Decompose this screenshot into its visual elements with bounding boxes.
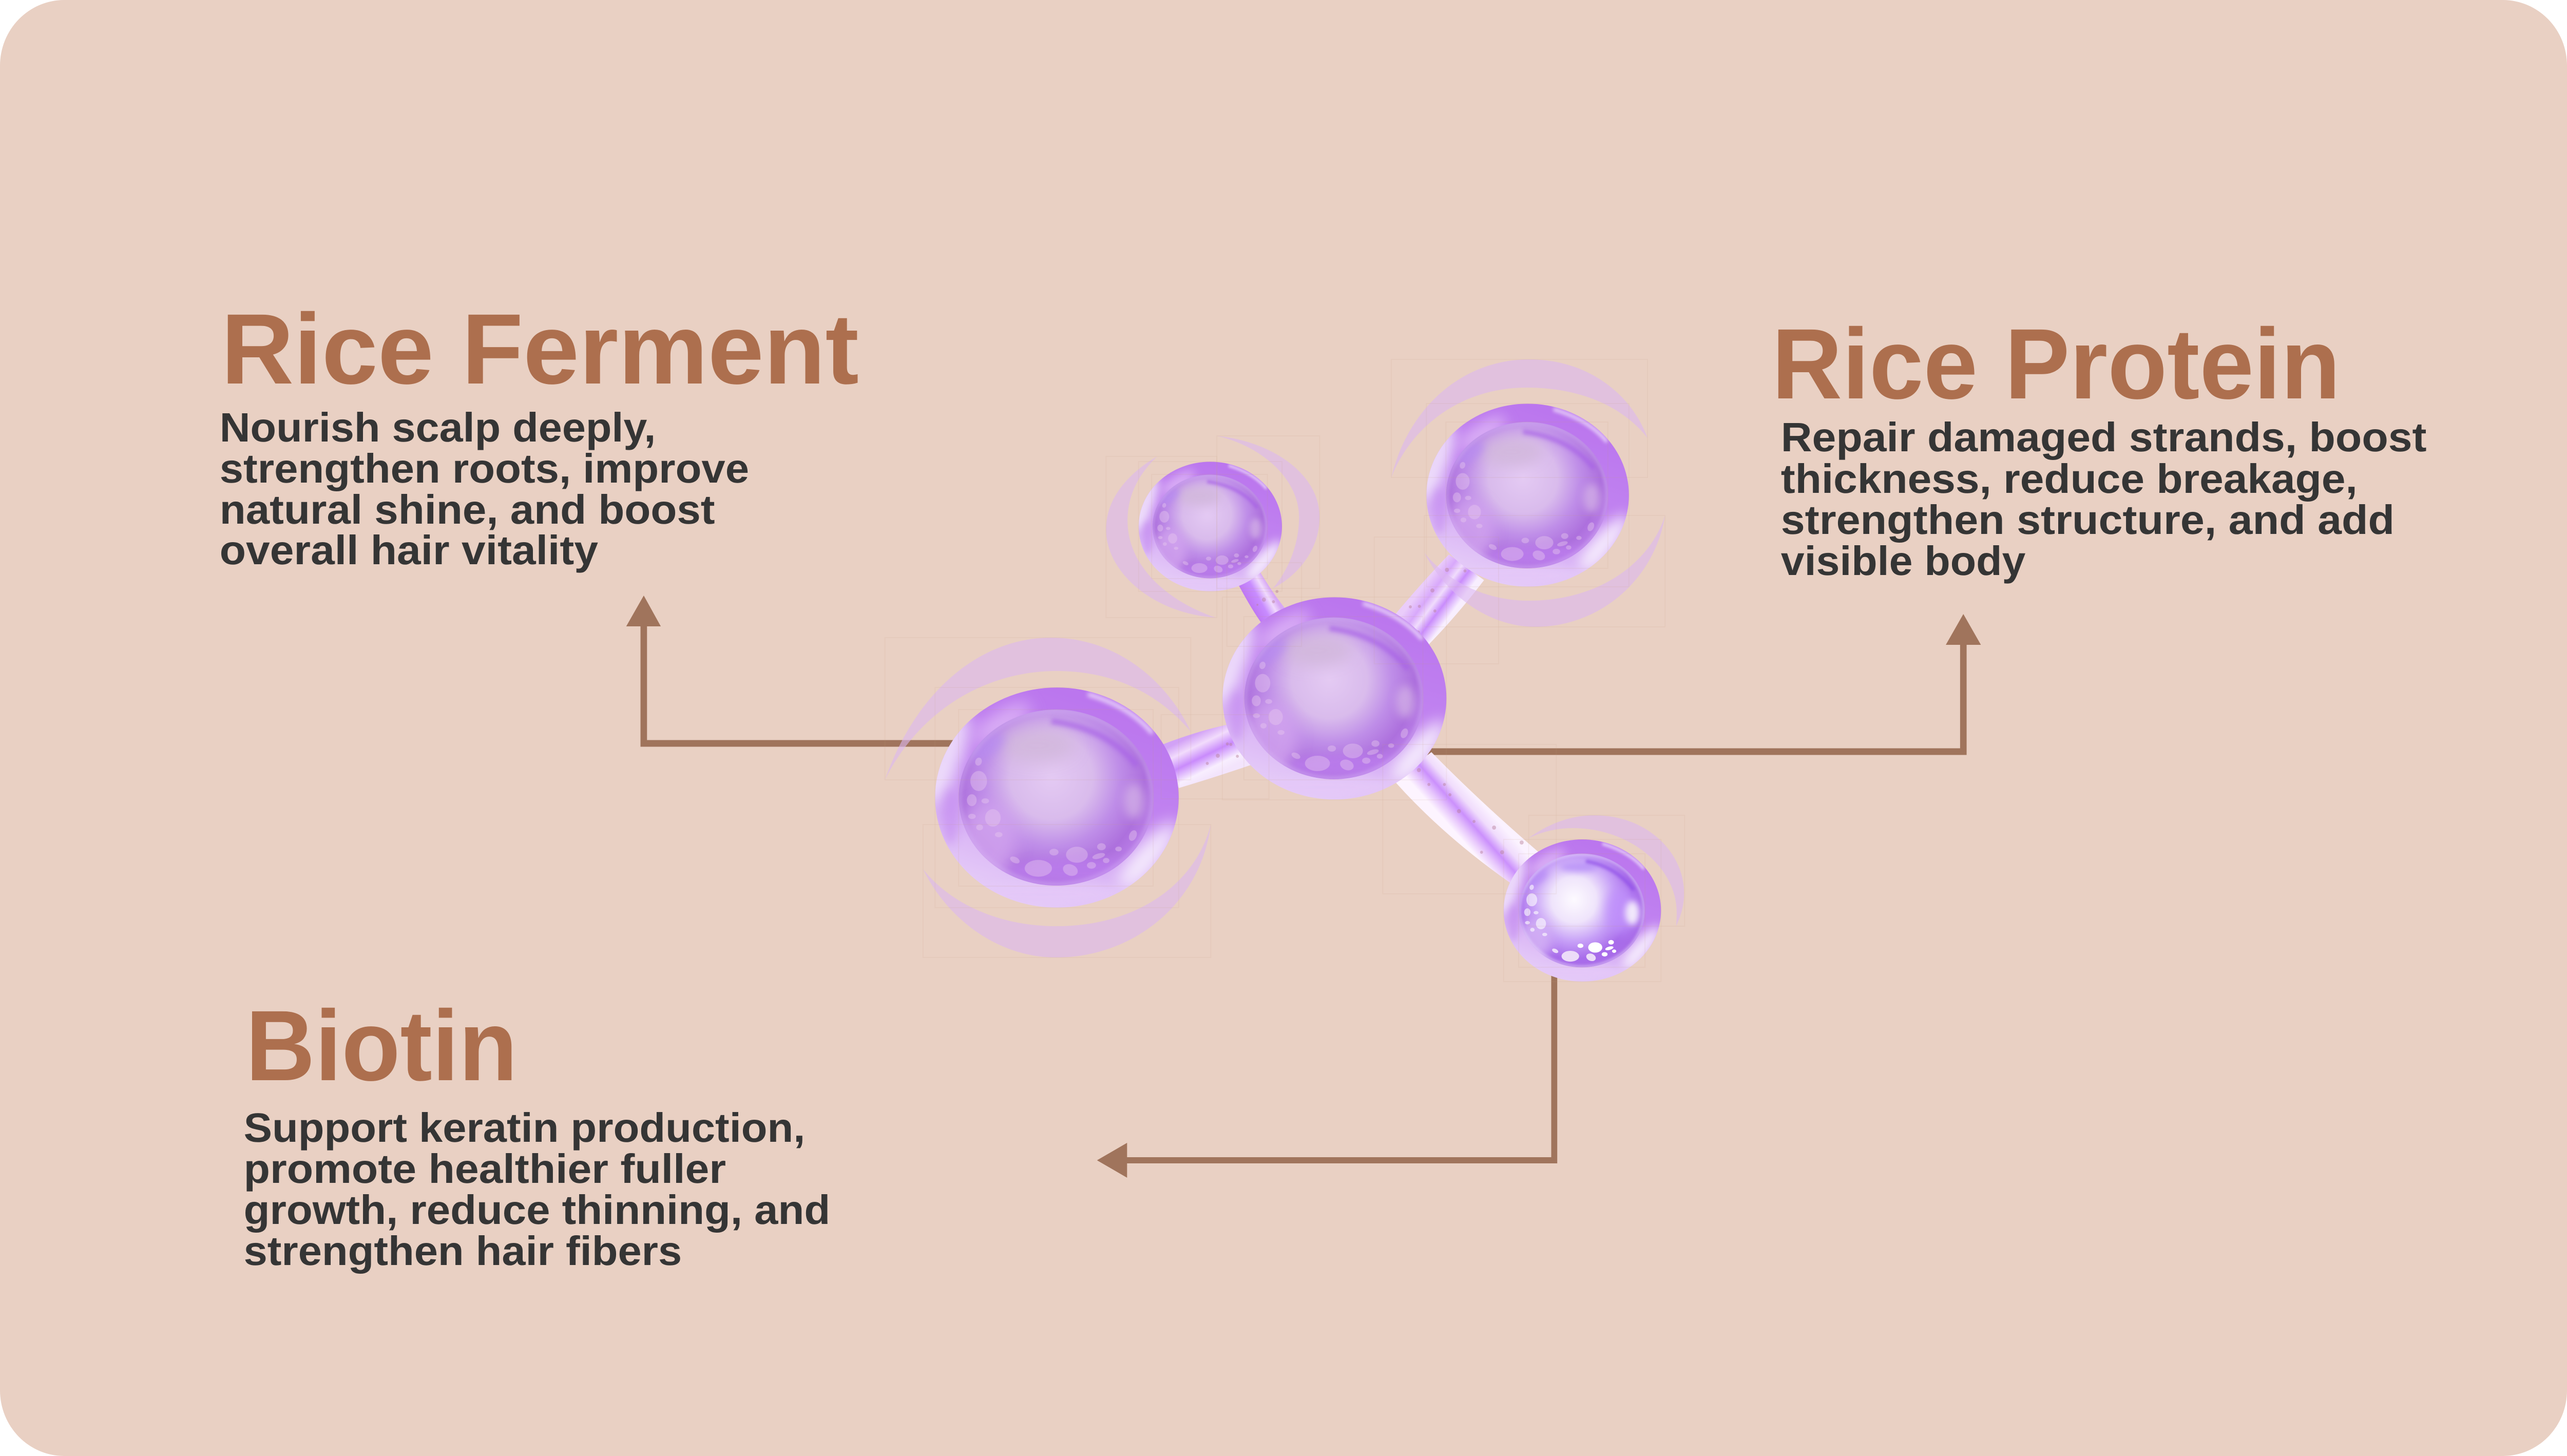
text block: Rice Ferment description: overall hair vitality <box>220 527 599 573</box>
arrow: from molecule up to Rice Protein <box>1404 614 1981 752</box>
text block: Rice Protein description <box>1781 414 2427 584</box>
heading: Biotin: Biotin <box>246 990 518 1102</box>
text block: Rice Protein description: Repair damaged strands, boost <box>1781 414 2427 460</box>
text block: Biotin description: strengthen hair fibers <box>244 1228 682 1274</box>
text block: Rice Ferment description: strengthen roots, improve <box>220 446 749 491</box>
text block: Rice Protein description: thickness, reduce breakage, <box>1781 456 2358 502</box>
text block: Biotin description: Support keratin production, <box>244 1105 805 1151</box>
text block: Biotin description: promote healthier fuller <box>244 1146 726 1192</box>
text block: Rice Ferment description: Nourish scalp deeply, <box>220 405 656 450</box>
molecule illustration <box>885 359 1684 982</box>
text block: Rice Ferment description <box>220 405 749 573</box>
arrow: from molecule up to Rice Ferment <box>626 596 978 743</box>
arrow: from molecule down to Biotin <box>1097 965 1554 1178</box>
heading: Rice Protein: Rice Protein <box>1772 308 2341 420</box>
text block: Rice Protein description: visible body <box>1781 538 2026 584</box>
heading: Rice Ferment: Rice Ferment <box>221 293 859 405</box>
molecule bonds <box>1163 554 1542 886</box>
text block: Biotin description <box>244 1105 830 1274</box>
text block: Rice Ferment description: natural shine, and boost <box>220 487 715 532</box>
sphere: large left <box>913 687 1186 908</box>
panel: Biotin <box>244 990 830 1274</box>
panel: Rice Ferment <box>220 293 859 573</box>
motion swooshes around spheres <box>885 359 1684 957</box>
text block: Rice Protein description: strengthen structure, and add <box>1781 497 2394 543</box>
panel: Rice Protein <box>1772 308 2427 584</box>
sphere: bright bottom right <box>1489 839 1666 982</box>
sphere: center <box>1202 597 1453 799</box>
sphere: top right <box>1408 404 1635 587</box>
sphere: small top left <box>1126 462 1287 591</box>
text block: Biotin description: growth, reduce thinning, and <box>244 1187 830 1233</box>
